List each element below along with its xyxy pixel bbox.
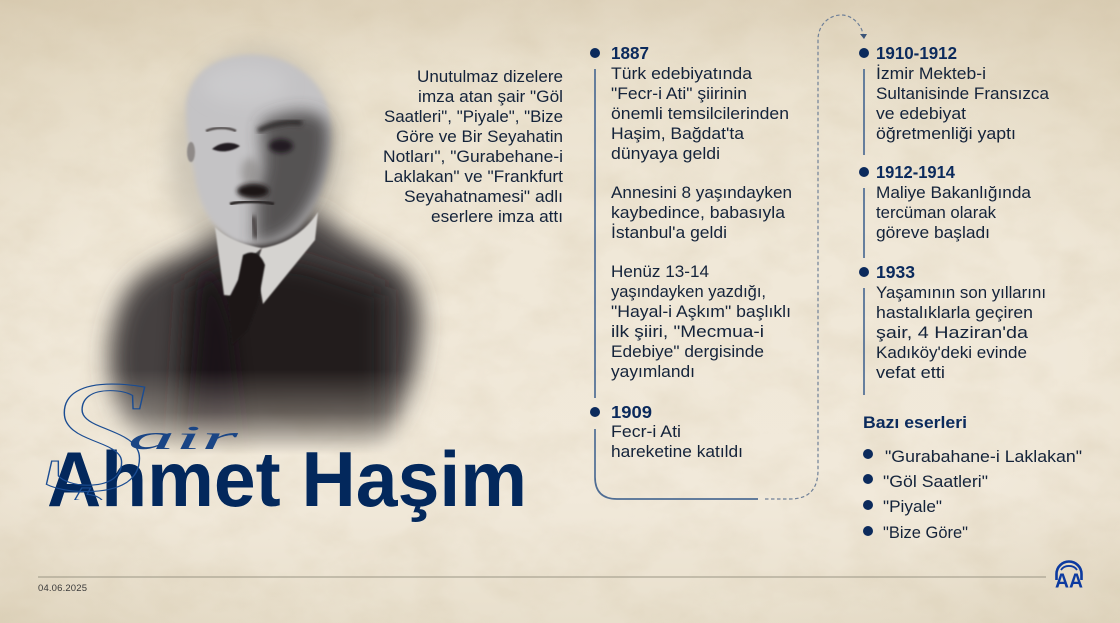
portrait moustache and mouth xyxy=(230,184,274,238)
portrait head xyxy=(186,55,330,245)
entry 1933: Kadıköy'deki evinde xyxy=(876,344,1027,362)
entry 1933: hastalıklarla geçiren xyxy=(876,304,1033,322)
works items: "Gurabahane-i Laklakan" xyxy=(885,448,1082,466)
entry 1887: Annesini 8 yaşındayken xyxy=(611,184,792,202)
solid connector lines, right column xyxy=(863,69,865,395)
portrait collar xyxy=(215,212,318,304)
entry 1887: dünyaya geldi xyxy=(611,145,720,163)
portrait tie xyxy=(228,252,265,345)
logo: Anadolu Agency: AA xyxy=(1055,570,1083,592)
intro paragraph xyxy=(383,68,563,226)
title: Ahmet Haşim: Ahmet Haşim xyxy=(47,435,527,523)
portrait soft halo xyxy=(170,48,346,272)
intro paragraph: Seyahatnamesi" adlı xyxy=(404,188,563,206)
script heading: Şair: Ş xyxy=(44,347,148,525)
portrait brows and eyes xyxy=(206,122,302,153)
works items xyxy=(863,448,1082,542)
entry 1910-1912: öğretmenliği yaptı xyxy=(876,125,1016,143)
entry 1887: 1887 xyxy=(611,43,649,63)
entry 1909: Fecr-i Ati xyxy=(611,423,681,441)
entry 1910-1912: Sultanisinde Fransızca xyxy=(876,85,1050,103)
entry 1910-1912: ve edebiyat xyxy=(876,105,966,123)
entry 1909 xyxy=(590,402,743,461)
entry 1909: hareketine katıldı xyxy=(611,443,743,461)
timeline column 2 xyxy=(859,43,1050,382)
intro paragraph: Notları", "Gurabehane-i xyxy=(383,148,563,166)
entry 1887: Türk edebiyatında xyxy=(611,65,753,83)
script heading: Şair: air xyxy=(128,420,240,457)
entry 1912-1914 xyxy=(859,162,1032,242)
entry 1887: İstanbul'a geldi xyxy=(611,223,727,242)
entry 1933: şair, 4 Haziran'da xyxy=(876,324,1029,342)
entry 1912-1914: 1912-1914 xyxy=(876,162,955,182)
entry 1887: yaşındayken yazdığı, xyxy=(611,283,766,301)
entry 1887: önemli temsilcilerinden xyxy=(611,105,789,123)
logo: Anadolu Agency xyxy=(1055,562,1083,592)
entry 1912-1914: göreve başladı xyxy=(876,224,990,242)
portrait ear xyxy=(187,142,195,162)
solid connector lines, left column xyxy=(595,69,758,499)
entry 1887: yayımlandı xyxy=(611,363,695,381)
entry 1887: ilk şiiri, "Mecmua-i xyxy=(611,323,764,341)
intro paragraph: Laklakan" ve "Frankfurt xyxy=(384,168,563,186)
entry 1909: 1909 xyxy=(611,402,652,422)
timeline connector xyxy=(595,15,867,499)
entry 1933: Yaşamının son yıllarını xyxy=(876,284,1046,302)
intro paragraph: Saatleri", "Piyale", "Bize xyxy=(384,108,563,126)
entry 1887: "Fecr-i Ati" şiirinin xyxy=(611,85,747,103)
connector arrow head xyxy=(860,34,867,39)
entry 1887: Edebiye" dergisinde xyxy=(611,343,764,361)
works items: "Bize Göre" xyxy=(883,524,968,542)
intro paragraph: imza atan şair "Göl xyxy=(418,88,563,106)
works items: "Göl Saatleri" xyxy=(883,473,988,491)
entry 1912-1914: tercüman olarak xyxy=(876,204,997,222)
works heading: Bazı eserleri xyxy=(863,414,967,432)
dashed connector to right column xyxy=(765,15,863,499)
intro paragraph: eserlere imza attı xyxy=(431,208,563,226)
date: 04.06.2025 xyxy=(38,583,87,594)
footer rule xyxy=(38,576,1046,578)
entry 1887: kaybedince, babasıyla xyxy=(611,204,786,222)
entry 1912-1914: Maliye Bakanlığında xyxy=(876,184,1032,202)
entry 1887: Haşim, Bağdat'ta xyxy=(611,125,745,143)
works list xyxy=(863,414,1082,542)
portrait photo of Ahmet Haşim xyxy=(110,48,421,455)
intro paragraph: Unutulmaz dizelere xyxy=(417,68,563,86)
entry 1887: "Hayal-i Aşkım" başlıklı xyxy=(611,303,791,321)
entry 1910-1912: 1910-1912 xyxy=(876,43,957,63)
portrait jacket xyxy=(110,212,421,455)
entry 1933 xyxy=(859,262,1046,382)
timeline column 1 xyxy=(590,43,792,461)
entry 1887 xyxy=(590,43,792,381)
entry 1887: Henüz 13-14 xyxy=(611,263,709,281)
entry 1933: 1933 xyxy=(876,262,915,282)
entry 1910-1912 xyxy=(859,43,1050,143)
entry 1910-1912: İzmir Mekteb-i xyxy=(876,64,986,83)
intro paragraph: Göre ve Bir Seyahatin xyxy=(396,128,563,146)
entry 1933: vefat etti xyxy=(876,364,945,382)
works items: "Piyale" xyxy=(883,498,942,516)
script heading: Şair xyxy=(46,384,238,500)
